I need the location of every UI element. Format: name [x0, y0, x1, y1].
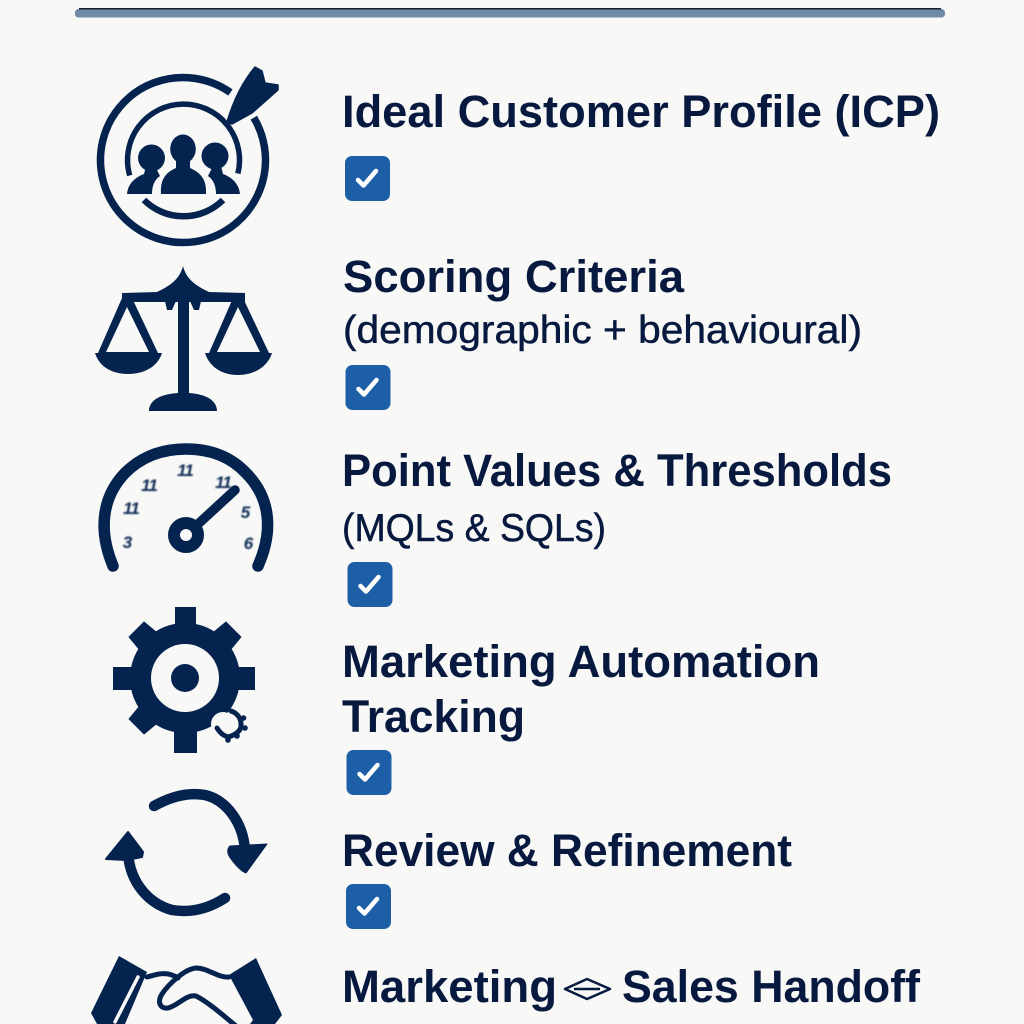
checkbox 5 [346, 884, 391, 929]
heading: Review and Refinement: Review & Refinement [342, 825, 792, 876]
icon: gauge: 11 [215, 473, 231, 492]
checkbox 2 [346, 365, 390, 410]
heading: Marketing Automation Tracking: Tracking [342, 691, 525, 742]
icon: gauge [104, 449, 268, 566]
checkbox 4 [346, 750, 392, 795]
top rule [75, 8, 945, 18]
icon: target with audience and arrow [100, 67, 278, 243]
heading: Scoring Criteria: Scoring Criteria [343, 251, 685, 302]
heading: Marketing Automation Tracking [342, 636, 820, 742]
checkbox 3 [348, 562, 392, 607]
icon: gauge: 11 [141, 476, 157, 495]
subheading: demographic + behavioural: (demographic + behavioural) [343, 309, 862, 352]
heading: Marketing to Sales Handoff: Sales Handoff [622, 961, 921, 1012]
icon: gauge: 6 [244, 534, 254, 553]
icon: gauge: 5 [241, 503, 251, 522]
heading: Point Values and Thresholds: Point Values & Thresholds [342, 445, 892, 496]
icon: gauge: 11 [123, 499, 139, 518]
icon: gauge: 11 [177, 461, 193, 480]
icon: handshake [91, 956, 282, 1024]
heading: Ideal Customer Profile: Ideal Customer Profile (ICP) [342, 86, 940, 137]
icon: gear [113, 607, 255, 753]
icon: gauge: 3 [123, 533, 133, 552]
heading: Marketing Automation Tracking: Marketing Automation [342, 636, 820, 687]
icon: refresh arrows [106, 794, 267, 911]
checkbox 1 [345, 156, 390, 201]
heading: Marketing to Sales Handoff [342, 961, 921, 1012]
heading: Marketing to Sales Handoff: Marketing [342, 961, 557, 1012]
subheading: MQLs and SQLs: (MQLs & SQLs) [342, 507, 606, 550]
icon: balance scales [95, 266, 272, 411]
